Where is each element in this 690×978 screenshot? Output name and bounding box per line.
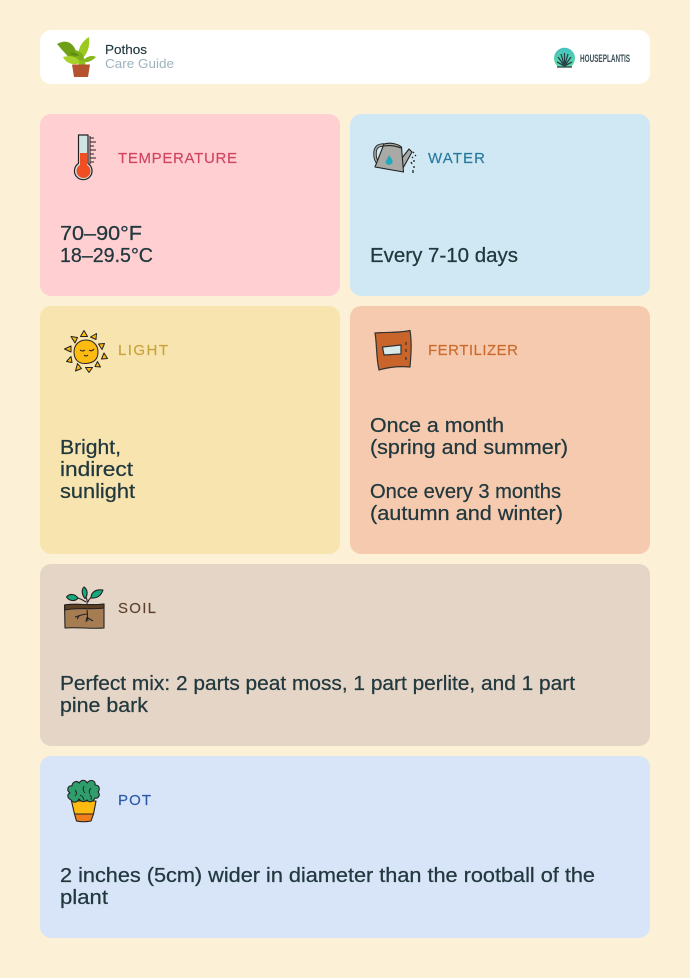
header title: Pothos <box>105 42 148 57</box>
pot value <box>60 865 595 909</box>
water value: Every 7-10 days <box>370 245 518 267</box>
fertilizer value <box>370 415 568 525</box>
panel: fertilizer <box>350 306 650 554</box>
panel: light <box>40 306 340 554</box>
fertilizer value: (spring and summer) <box>370 437 568 459</box>
soil value <box>60 673 575 717</box>
temperature values: 70–90°F <box>60 223 142 245</box>
icon: soil with sprout <box>64 587 104 628</box>
panel: temperature <box>40 114 340 296</box>
fertilizer value: (autumn and winter) <box>370 503 563 525</box>
light label: LIGHT <box>118 342 168 359</box>
light value: indirect <box>60 459 133 481</box>
light value: Bright, <box>60 437 121 459</box>
temperature values <box>60 223 153 267</box>
fertilizer label: FERTILIZER <box>428 342 518 359</box>
icon: thermometer <box>74 135 96 180</box>
panel: water <box>350 114 650 296</box>
pot value: plant <box>60 887 108 909</box>
soil value: Perfect mix: 2 parts peat moss, 1 part perlite, and 1 part <box>60 673 575 695</box>
brand logo <box>554 48 630 68</box>
temperature label: TEMPERATURE <box>118 150 237 167</box>
header subtitle: Care Guide <box>105 56 174 71</box>
panel: soil <box>40 564 650 746</box>
icon: fertilizer bag <box>375 330 411 370</box>
fertilizer value: Once a month <box>370 415 504 437</box>
pot label: POT <box>118 792 151 809</box>
brand logo: HOUSEPLANTIS <box>580 53 630 65</box>
header bar <box>40 30 650 84</box>
soil value: pine bark <box>60 695 149 717</box>
icon: potted pothos <box>57 37 96 77</box>
soil label: SOIL <box>118 600 156 617</box>
icon: potted plant <box>68 780 99 822</box>
temperature values: 18–29.5°C <box>60 245 153 267</box>
pot value: 2 inches (5cm) wider in diameter than the rootball of the <box>60 865 595 887</box>
icon: watering can <box>375 143 416 173</box>
light value <box>60 437 135 503</box>
icon: sun <box>64 330 108 372</box>
fertilizer value: Once every 3 months <box>370 481 561 503</box>
light value: sunlight <box>60 481 135 503</box>
panel: pot <box>40 756 650 938</box>
water label: WATER <box>428 150 485 167</box>
